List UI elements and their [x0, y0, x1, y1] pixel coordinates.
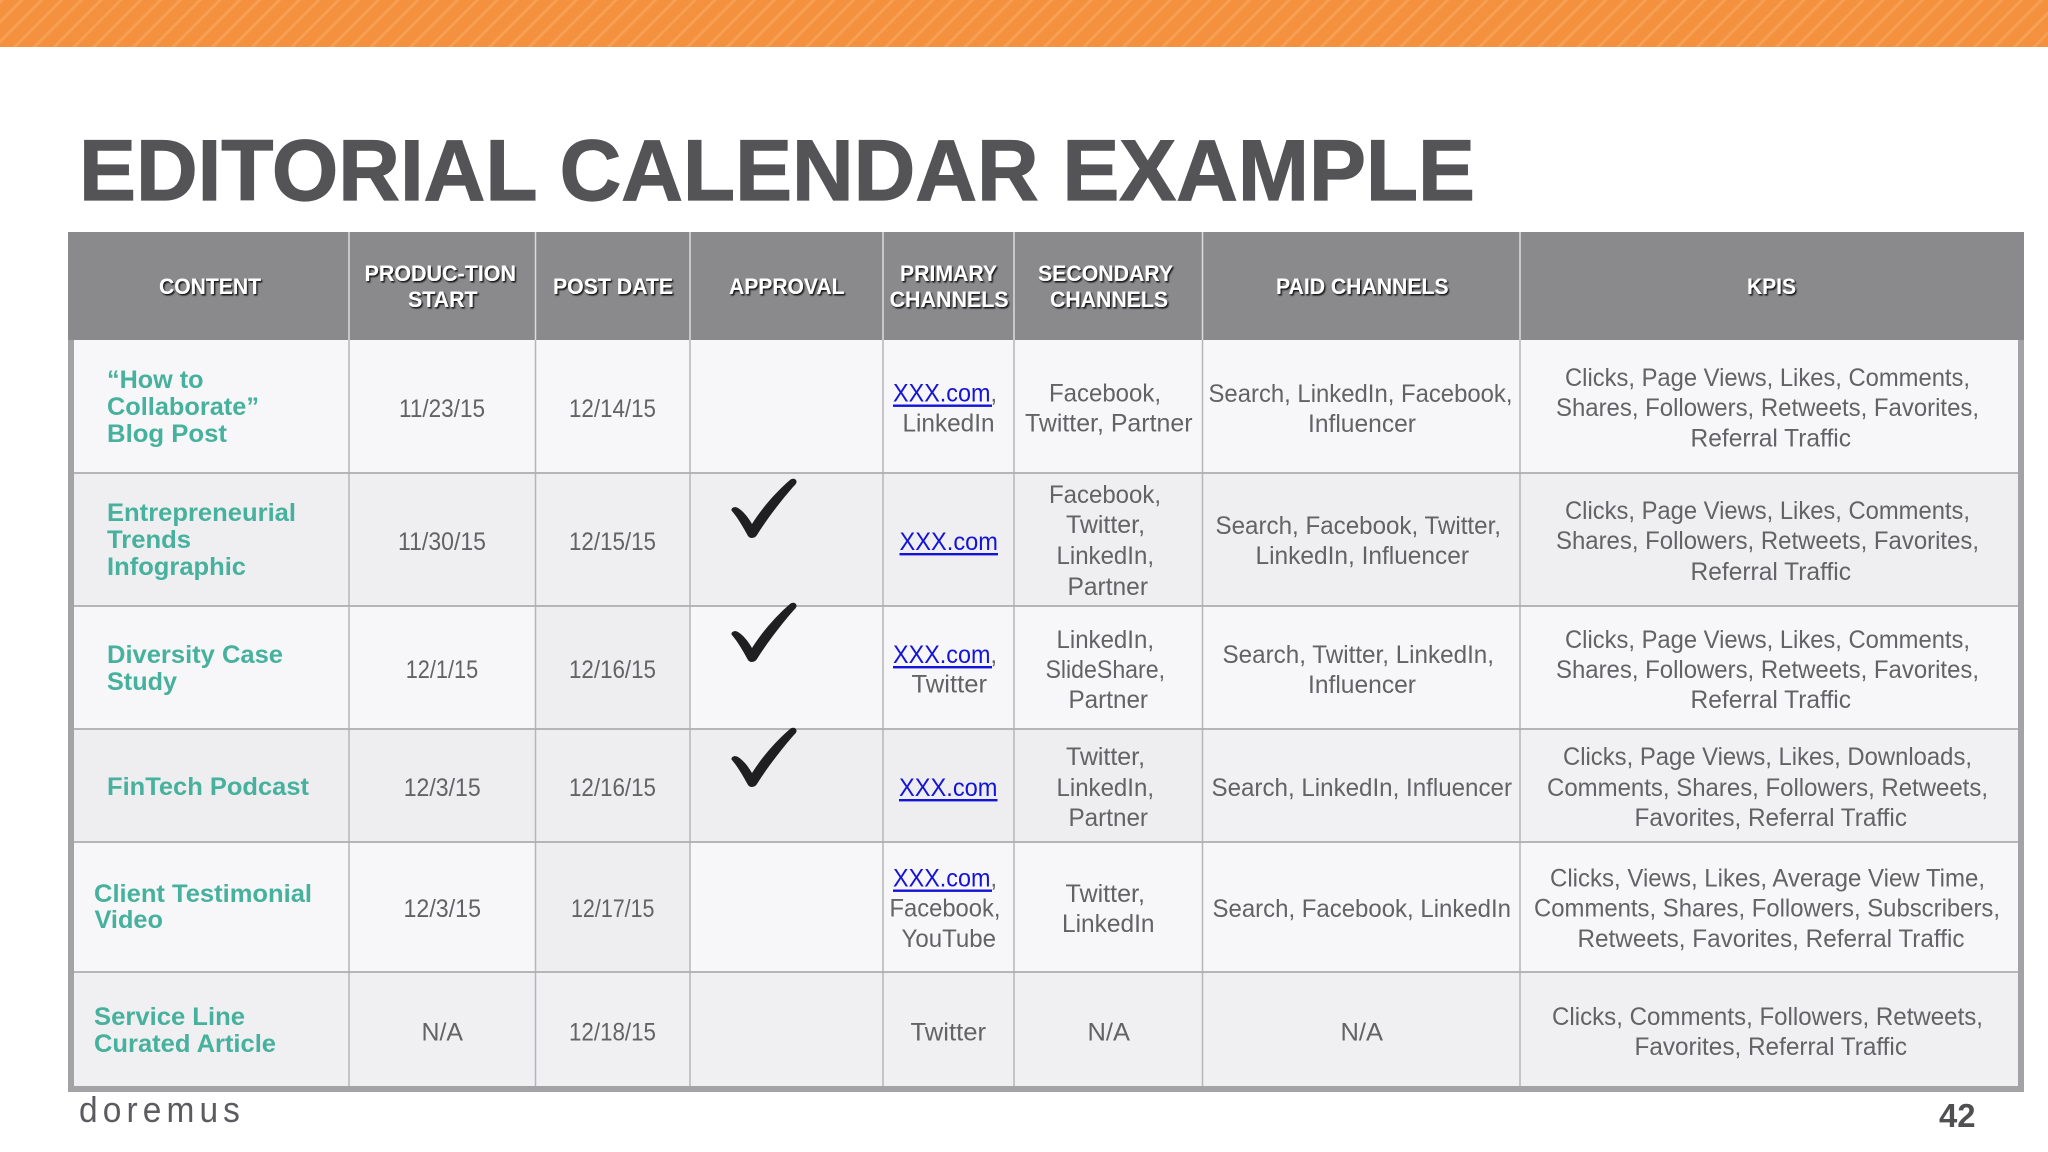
row 1: How to Collaborate Blog Post [107, 364, 1979, 452]
secondary channels: Facebook, [1049, 380, 1161, 408]
paid channels [1208, 380, 1512, 438]
primary channels: XXX.com, [893, 865, 997, 893]
header labels: START [408, 287, 478, 312]
header labels: KPIS [1747, 274, 1796, 299]
primary channels: XXX.com, [893, 641, 997, 669]
content title: Infographic [107, 553, 246, 581]
kpis: Referral Traffic [1690, 686, 1851, 714]
header labels: PAID CHANNELS [1276, 274, 1448, 299]
secondary channels [1056, 743, 1154, 832]
kpis: Comments, Shares, Followers, Retweets, [1547, 774, 1988, 802]
secondary channels: LinkedIn, [1056, 774, 1154, 802]
row 6: Service Line Curated Article: 12/18/15 [569, 1019, 656, 1047]
row 6: Service Line Curated Article [94, 1003, 1983, 1061]
icon: approval check mark [731, 603, 797, 662]
kpis: Shares, Followers, Retweets, Favorites, [1556, 394, 1979, 422]
secondary channels: SlideShare, [1046, 656, 1165, 684]
secondary channels: Twitter, Partner [1025, 410, 1192, 438]
secondary channels: Partner [1068, 686, 1148, 714]
kpis [1556, 497, 1979, 586]
header labels: PRIMARY [900, 261, 997, 286]
header labels: CONTENT [159, 274, 262, 299]
row 3: Diversity Case Study: 12/1/15 [406, 656, 478, 684]
row 1: How to Collaborate Blog Post: 11/23/15 [399, 395, 485, 423]
kpis [1552, 1003, 1983, 1061]
header labels: CHANNELS [890, 287, 1009, 312]
secondary channels: LinkedIn [1062, 910, 1154, 938]
kpis: Retweets, Favorites, Referral Traffic [1578, 925, 1964, 953]
secondary channels: Twitter, [1066, 743, 1145, 771]
primary channels: XXX.com [900, 528, 998, 556]
kpis: Favorites, Referral Traffic [1634, 804, 1907, 832]
content title: Service Line [94, 1003, 245, 1031]
row 2: Entrepreneurial Trends Infographic: 12/15/15 [569, 528, 656, 556]
secondary channels [1025, 380, 1192, 438]
content title: “How to [107, 366, 204, 394]
row 5: Client Testimonial Video [94, 865, 2000, 953]
grid lines [349, 340, 1520, 1086]
row 3: Diversity Case Study: 12/16/15 [569, 656, 656, 684]
kpis: Comments, Shares, Followers, Subscribers, [1534, 895, 2000, 923]
kpis: Referral Traffic [1690, 558, 1851, 586]
primary channels [890, 865, 1000, 953]
kpis: Clicks, Page Views, Likes, Downloads, [1563, 743, 1972, 771]
header labels: SECONDARY [1038, 261, 1173, 286]
header labels: PRODUC-TION [364, 261, 516, 286]
table frame [68, 232, 2024, 1092]
content title [94, 1003, 276, 1058]
primary channels: LinkedIn [902, 410, 994, 438]
row 5: Client Testimonial Video: Search, Facebook, LinkedIn [1212, 895, 1511, 923]
secondary channels: LinkedIn, [1056, 626, 1154, 654]
content title: Blog Post [107, 420, 228, 448]
header row [68, 232, 2024, 340]
row 6: Service Line Curated Article: N/A [1088, 1019, 1130, 1047]
kpis [1534, 865, 2000, 953]
content title [107, 641, 283, 696]
kpis: Favorites, Referral Traffic [1634, 1033, 1907, 1061]
kpis: Referral Traffic [1690, 424, 1851, 452]
header labels [159, 261, 1796, 312]
secondary channels: Facebook, [1049, 481, 1161, 509]
primary channels: Twitter [912, 671, 987, 699]
kpis [1556, 626, 1979, 714]
content title: Entrepreneurial [107, 499, 296, 527]
kpis: Clicks, Views, Likes, Average View Time, [1550, 865, 1985, 893]
header labels: APPROVAL [729, 274, 844, 299]
paid channels: Search, Twitter, LinkedIn, [1222, 641, 1494, 669]
icon: approval check mark [731, 479, 797, 538]
secondary channels: Twitter, [1066, 511, 1145, 539]
secondary channels [1049, 481, 1161, 601]
content title: Collaborate” [107, 393, 259, 421]
kpis [1556, 364, 1979, 452]
kpis [1547, 743, 1988, 832]
row 6: Service Line Curated Article: N/A [1340, 1019, 1383, 1047]
row 3: Diversity Case Study [107, 603, 1979, 714]
footer logo: doremus: doremus [79, 1091, 245, 1130]
secondary channels: Partner [1068, 573, 1148, 601]
primary channels: XXX.com [899, 774, 998, 802]
row 5: Client Testimonial Video: 12/3/15 [404, 895, 481, 923]
header labels: CHANNELS [1050, 287, 1168, 312]
secondary channels: Partner [1068, 804, 1148, 832]
secondary channels [1046, 626, 1165, 714]
secondary channels: LinkedIn, [1056, 542, 1154, 570]
secondary channels: Twitter, [1066, 880, 1145, 908]
icon: approval check mark [731, 728, 797, 787]
content title [107, 366, 259, 448]
row 4: FinTech Podcast: Search, LinkedIn, Influencer [1212, 774, 1512, 802]
secondary channels [1062, 880, 1154, 938]
paid channels [1216, 512, 1501, 570]
kpis: Clicks, Comments, Followers, Retweets, [1552, 1003, 1983, 1031]
panel: editorial calendar table [68, 232, 2024, 1092]
row 1: How to Collaborate Blog Post: 12/14/15 [569, 395, 656, 423]
title: EDITORIAL CALENDAR EXAMPLE [79, 123, 1475, 219]
kpis: Shares, Followers, Retweets, Favorites, [1556, 527, 1979, 555]
row backgrounds [74, 340, 2018, 1086]
kpis: Clicks, Page Views, Likes, Comments, [1565, 626, 1970, 654]
row 5: Client Testimonial Video: 12/17/15 [571, 895, 654, 923]
page number: 42 [1939, 1097, 1976, 1134]
content title [107, 499, 296, 581]
paid channels: Search, LinkedIn, Facebook, [1208, 380, 1512, 408]
header labels: POST DATE [553, 274, 673, 299]
kpis: Clicks, Page Views, Likes, Comments, [1565, 364, 1970, 392]
content title: Diversity Case [107, 641, 283, 669]
row 2: Entrepreneurial Trends Infographic: 11/30/15 [398, 528, 486, 556]
top orange band [0, 0, 2048, 47]
row 4: FinTech Podcast: 12/16/15 [569, 774, 656, 802]
content title: Video [94, 906, 163, 934]
kpis: Shares, Followers, Retweets, Favorites, [1556, 656, 1979, 684]
row 4: FinTech Podcast [107, 728, 1988, 832]
kpis: Clicks, Page Views, Likes, Comments, [1565, 497, 1970, 525]
paid channels: Influencer [1308, 671, 1416, 699]
primary channels: Facebook, [890, 895, 1000, 923]
primary channels: YouTube [902, 925, 996, 953]
paid channels: Search, Facebook, Twitter, [1216, 512, 1501, 540]
content title: Curated Article [94, 1030, 276, 1058]
content title: Client Testimonial [94, 880, 312, 908]
primary channels [893, 641, 997, 699]
row 4: FinTech Podcast: FinTech Podcast [107, 773, 310, 801]
content title: Study [107, 668, 177, 696]
paid channels [1222, 641, 1494, 699]
row 6: Service Line Curated Article: Twitter [910, 1019, 986, 1047]
row 2: Entrepreneurial Trends Infographic [107, 479, 1979, 601]
row 4: FinTech Podcast: 12/3/15 [404, 774, 481, 802]
content title: Trends [107, 526, 191, 554]
paid channels: Influencer [1308, 410, 1416, 438]
paid channels: LinkedIn, Influencer [1256, 542, 1469, 570]
content title [94, 880, 312, 934]
primary channels [893, 380, 997, 438]
primary channels: XXX.com, [893, 380, 997, 408]
row 6: Service Line Curated Article: N/A [422, 1019, 463, 1047]
